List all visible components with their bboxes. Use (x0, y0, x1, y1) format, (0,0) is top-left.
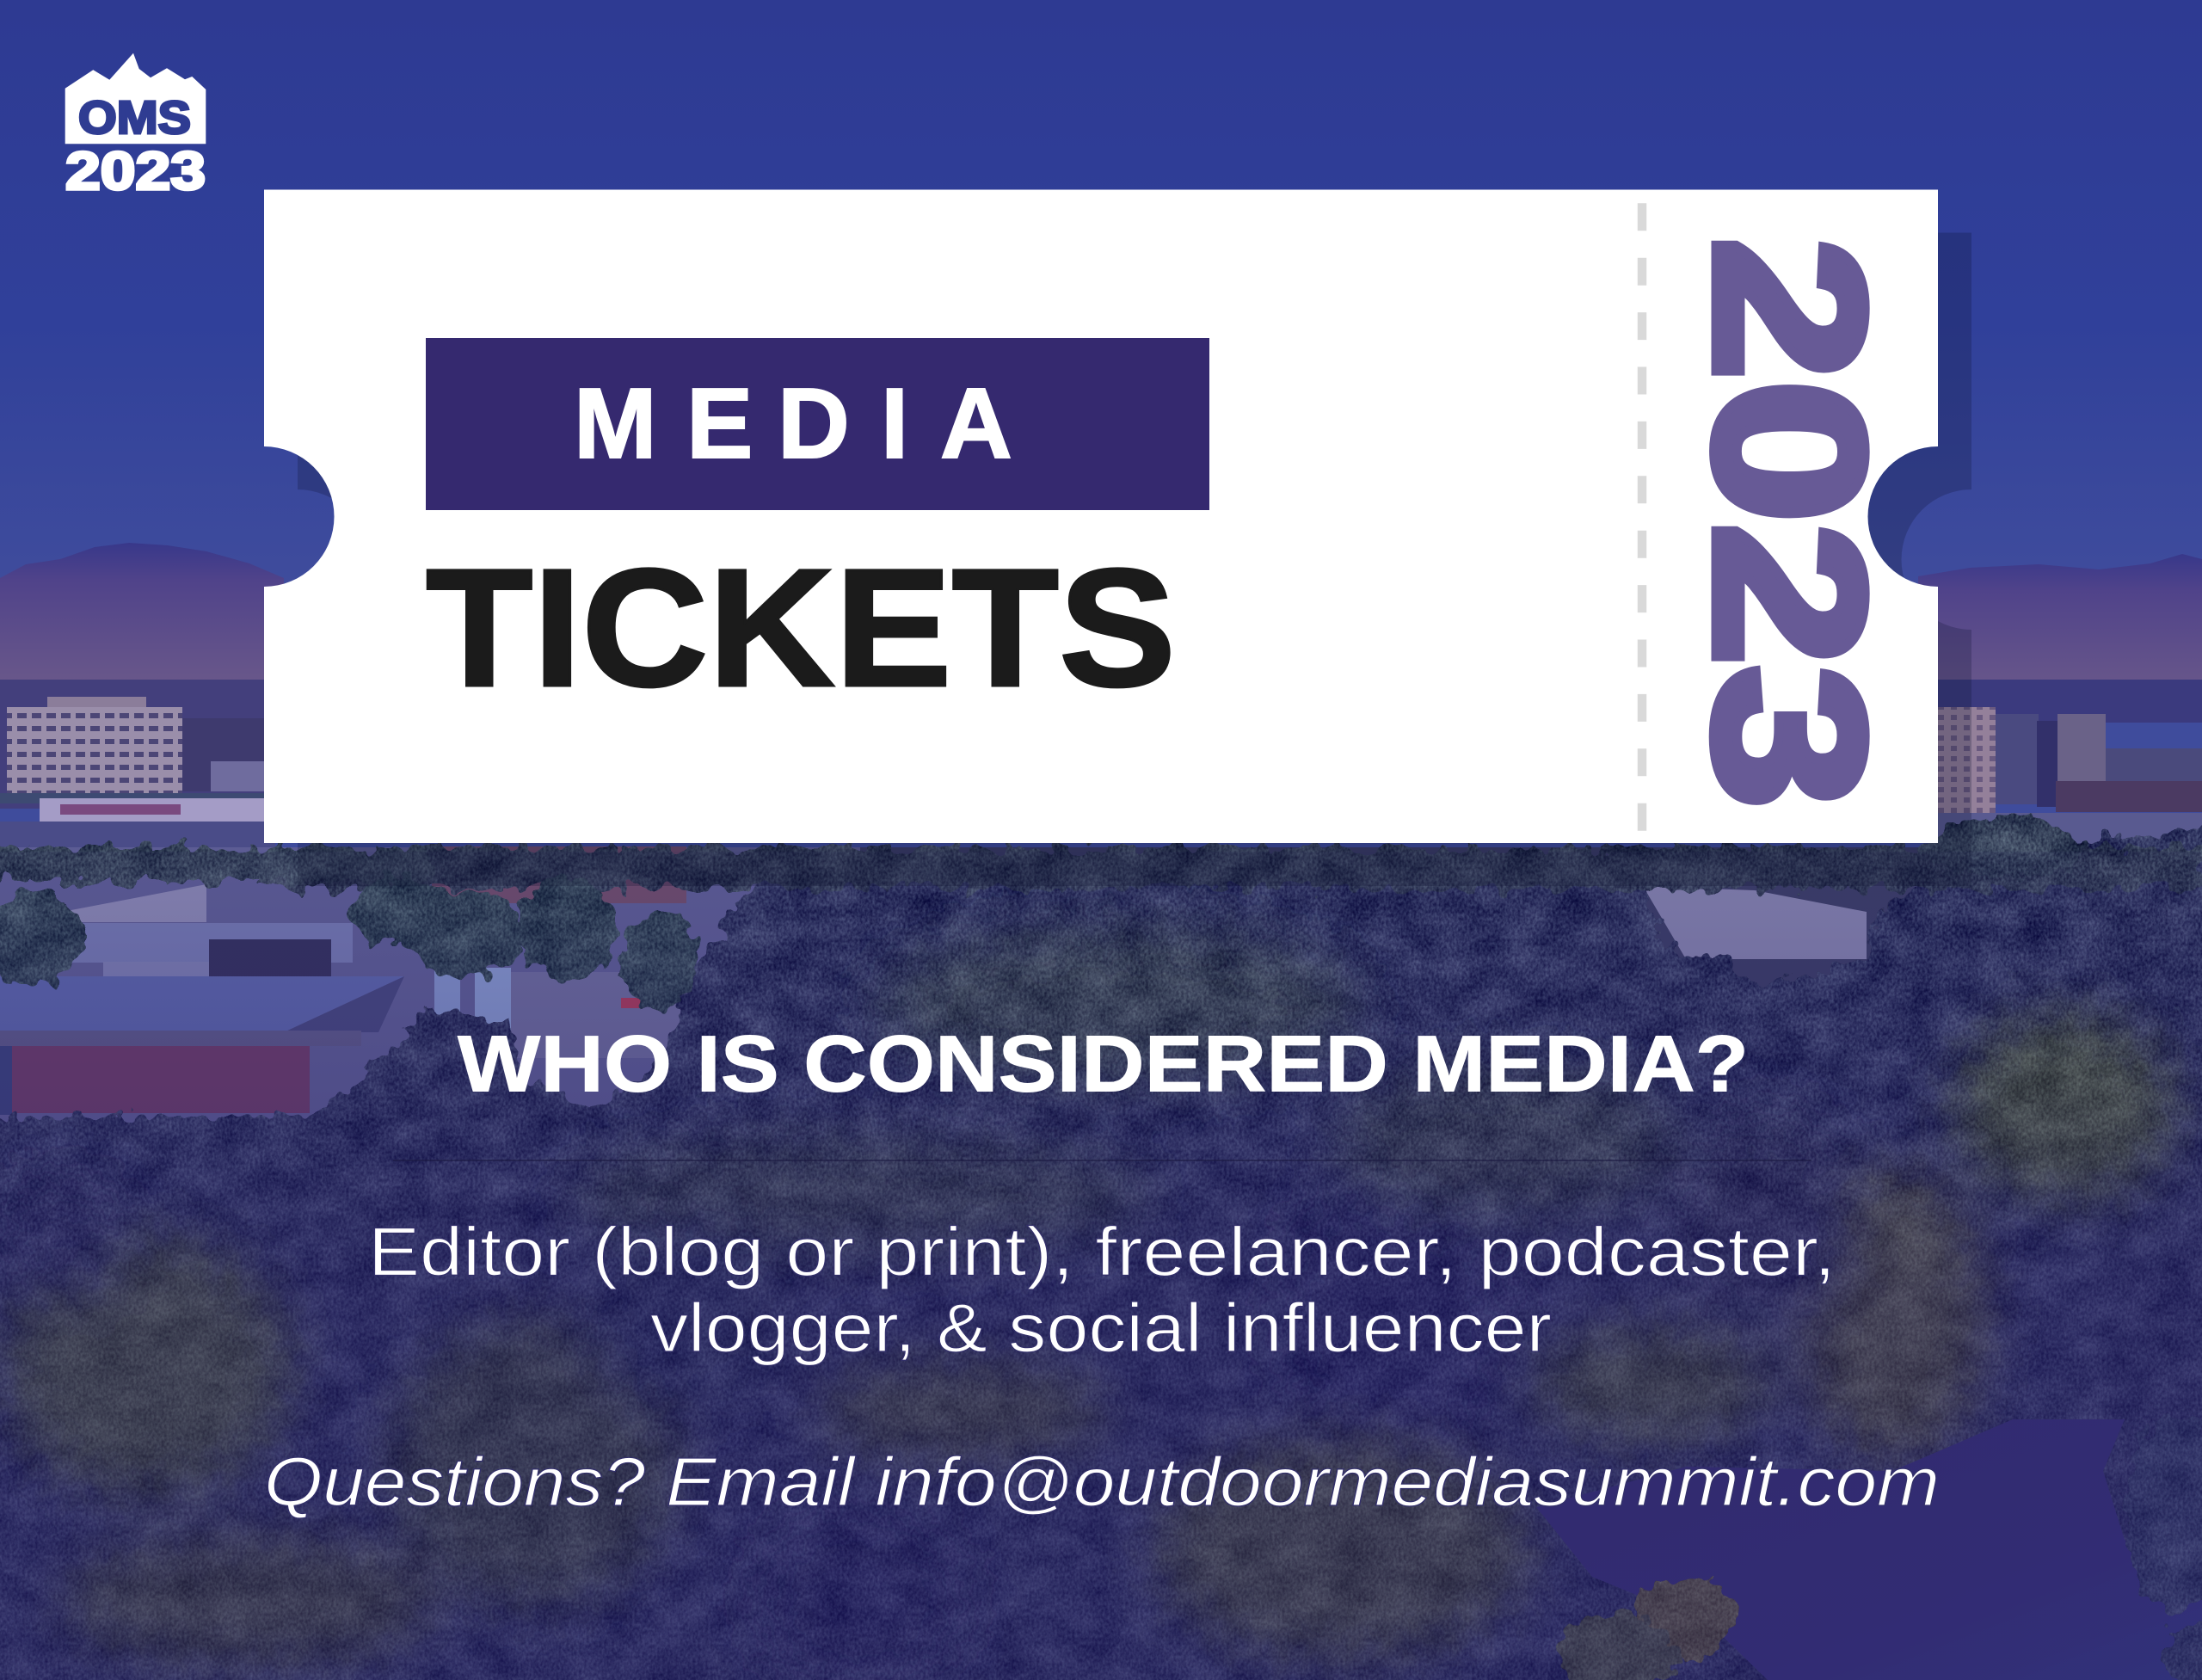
logo text OMS: OMS (78, 92, 191, 144)
vertical year 2023: 2023 (1670, 237, 1910, 809)
logo: OMS 2023 (65, 53, 206, 201)
heading: who is considered media: WHO IS CONSIDERED MEDIA? (458, 1019, 1749, 1109)
right building among trees (1643, 886, 1867, 959)
river (1536, 1419, 2202, 1680)
logo mountain badge (65, 53, 206, 144)
perforation line (1638, 189, 1646, 843)
ticket body (264, 189, 1938, 843)
trees and forest with foliage texture (0, 817, 2202, 1680)
heading: tickets: TICKETS (426, 534, 1176, 722)
foliage tone blotches (0, 929, 2176, 1680)
left mountain (0, 543, 284, 714)
tree clumps in town (0, 817, 2202, 1006)
text block: media types: Editor (blog or print), freelancer, podcaster, (368, 1213, 1836, 1290)
riverside trees (1557, 1415, 2202, 1680)
right mountains (1918, 554, 2202, 723)
text block: contact email: Questions? Email info@outdoormediasummit.com (264, 1443, 1940, 1520)
ticket drop shadow (298, 232, 1971, 886)
purple photo tint (0, 852, 2202, 1680)
right downtown buildings (1918, 680, 2202, 860)
label: media banner: MEDIA (574, 367, 1012, 479)
panel: ticket (264, 189, 1938, 843)
logo text 2023: 2023 (65, 142, 206, 201)
text block: media types (368, 1213, 1836, 1366)
text block: media types: vlogger, & social influencer (650, 1289, 1552, 1366)
lower town behind the trees (0, 846, 2202, 1123)
left downtown buildings (0, 680, 275, 860)
label: media banner (426, 338, 1209, 510)
